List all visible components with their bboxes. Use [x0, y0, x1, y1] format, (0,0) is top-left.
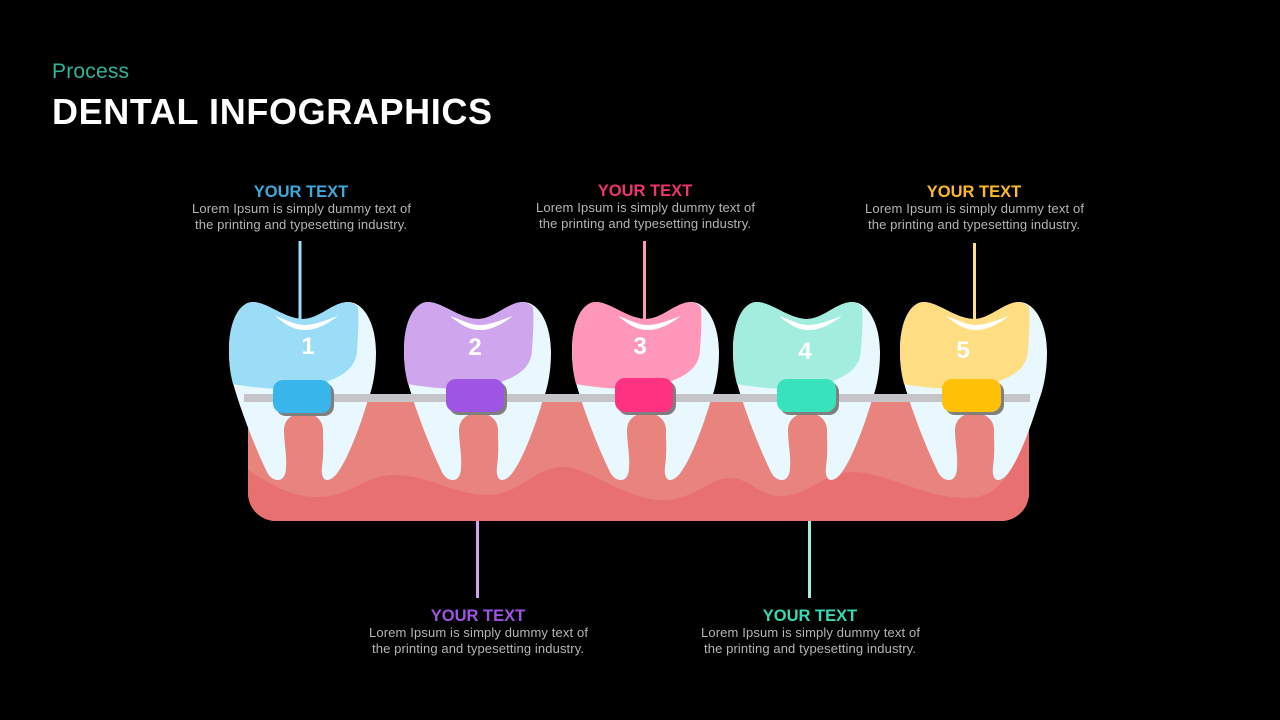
callout 4: Lorem Ipsum is simply dummy text of: [701, 625, 920, 640]
callout 5: YOUR TEXT: [927, 183, 1021, 201]
callout 2: the printing and typesetting industry.: [372, 641, 584, 656]
callout 2: YOUR TEXT: [431, 607, 525, 625]
tooth 3: pink: [572, 302, 719, 480]
gum darker wave: [248, 430, 1029, 521]
callout 2: Lorem Ipsum is simply dummy text of: [369, 625, 588, 640]
callout 5: the printing and typesetting industry.: [868, 217, 1080, 232]
callout 5: [865, 183, 1084, 232]
tooth 1: blue: [229, 302, 376, 480]
callout 4: YOUR TEXT: [763, 607, 857, 625]
bracket 5: [942, 379, 1004, 415]
callout 1: Lorem Ipsum is simply dummy text of: [192, 201, 411, 216]
tooth number 3: 3: [633, 333, 647, 360]
connector line 1: [298, 241, 302, 320]
tooth 5: yellow: [900, 302, 1047, 480]
tooth number 4: 4: [798, 338, 812, 365]
callout 1: [192, 183, 411, 232]
callout 4: [701, 607, 920, 656]
callout 1: YOUR TEXT: [254, 183, 348, 201]
tooth 4: teal: [733, 302, 880, 480]
braces wire: [244, 394, 1030, 402]
subtitle: Process: Process: [52, 60, 129, 83]
callout 3: YOUR TEXT: [598, 182, 692, 200]
connector line 3: [643, 241, 646, 320]
callout 3: [536, 182, 755, 231]
connector line 2: [476, 521, 479, 598]
callout 4: the printing and typesetting industry.: [704, 641, 916, 656]
tooth number 2: 2: [468, 334, 482, 361]
tooth 2: purple: [404, 302, 551, 480]
tooth number 1: 1: [301, 333, 315, 360]
callout 2: [369, 607, 588, 656]
bracket 1: [273, 380, 334, 416]
callout 3: Lorem Ipsum is simply dummy text of: [536, 200, 755, 215]
tooth number 5: 5: [956, 337, 970, 364]
callout 3: the printing and typesetting industry.: [539, 216, 751, 231]
gum base: [248, 402, 1029, 521]
title: DENTAL INFOGRAPHICS: [52, 91, 492, 132]
connector line 5: [973, 243, 976, 320]
bracket 4: [777, 379, 839, 415]
callout 1: the printing and typesetting industry.: [195, 217, 407, 232]
bracket 2: [446, 379, 507, 415]
callout 5: Lorem Ipsum is simply dummy text of: [865, 201, 1084, 216]
bracket 3: [615, 378, 676, 415]
connector line 4: [808, 521, 811, 598]
